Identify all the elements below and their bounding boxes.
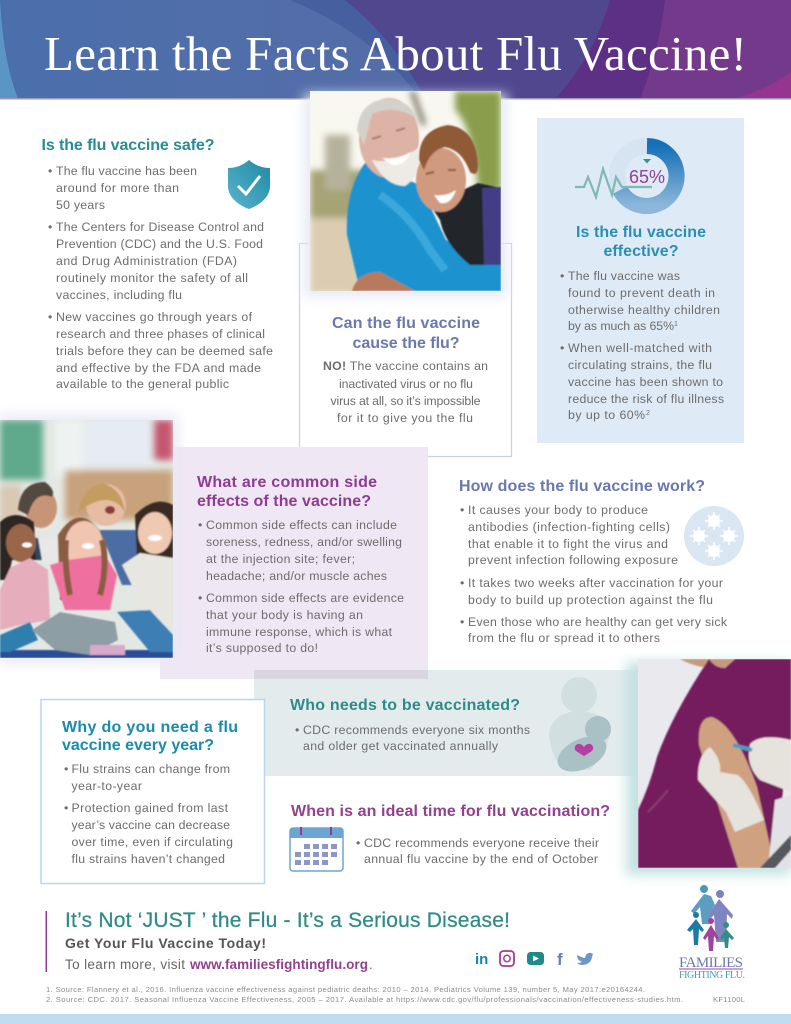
side effects bullet list: Common side effects can include	[206, 518, 397, 532]
side effects bullet list: at the injection site; fever;	[206, 552, 355, 566]
social media icons	[475, 950, 593, 969]
heading: effective: Is the flu vaccine	[576, 224, 706, 241]
when bullet text: annual flu vaccine by the end of October	[364, 852, 598, 866]
safe bullet list	[48, 164, 273, 391]
safe bullet list: research and three phases of clinical	[56, 327, 265, 341]
answer text: virus at all, so it’s impossible	[330, 394, 481, 408]
safe bullet list: Prevention (CDC) and the U.S. Food	[56, 237, 263, 251]
call to action: www.familiesfightingflu.org	[189, 957, 368, 972]
blonde boy	[86, 484, 126, 526]
call to action: .	[369, 957, 373, 972]
safe bullet list: •	[48, 220, 52, 234]
effective bullet list: circulating strains, the flu	[568, 358, 712, 372]
panel: is the flu vaccine safe	[42, 137, 273, 391]
photo: group of children	[0, 415, 178, 663]
heading: side effects	[197, 474, 377, 510]
heading: how: How does the flu vaccine work?	[459, 478, 705, 495]
who bullet list	[295, 723, 530, 753]
left girl	[0, 515, 36, 580]
how bullet list: that enable it to fight the virus and	[468, 537, 668, 551]
safe bullet list: The flu vaccine has been	[56, 164, 197, 178]
icon: 65% donut chart with pulse: 65%	[629, 167, 665, 187]
heading: why: Why do you need a flu	[62, 719, 238, 736]
logo: Families Fighting Flu	[679, 885, 745, 981]
safe bullet list: routinely monitor the safety of all	[56, 271, 248, 285]
heading: who: Who needs to be vaccinated?	[290, 697, 520, 714]
who bullet list: •	[295, 723, 299, 737]
heading: effective	[576, 224, 706, 260]
safe bullet list: around for more than	[56, 181, 179, 195]
safe bullet list: •	[48, 164, 52, 178]
effective bullet list: The flu vaccine was	[568, 269, 680, 283]
icon: pregnant silhouette	[549, 677, 612, 779]
effective bullet list: 1	[674, 321, 678, 328]
bottom bar	[0, 1014, 791, 1024]
man jacket	[347, 163, 501, 291]
safe bullet list: trials before they can be deemed safe	[56, 344, 273, 358]
footnotes: KF1100L	[713, 995, 745, 1004]
right girl	[134, 500, 173, 559]
panel: who needs to be vaccinated	[254, 670, 638, 779]
how bullet list	[460, 503, 728, 645]
photo: pregnant woman receiving vaccination	[626, 659, 791, 875]
heading: why	[62, 719, 238, 754]
heading: cause: cause the flu?	[352, 335, 460, 352]
side effects bullet list: headache; and/or muscle aches	[206, 569, 387, 583]
social media icons: f	[557, 950, 563, 969]
heading: cause: Can the flu vaccine	[332, 315, 480, 332]
effective bullet list: found to prevent death in	[568, 286, 715, 300]
effective bullet list: •	[560, 269, 564, 283]
when bullet text: CDC recommends everyone receive their	[364, 836, 599, 850]
effective bullet list: reduce the risk of flu illness	[568, 392, 724, 406]
safe bullet list: available to the general public	[56, 377, 229, 391]
who bullet list: CDC recommends everyone six months	[303, 723, 530, 737]
how bullet list: It takes two weeks after vaccination for your	[468, 576, 723, 590]
effective bullet list	[560, 269, 724, 422]
when bullet text: •	[356, 836, 360, 850]
panel: is the flu vaccine effective	[537, 118, 744, 443]
logo: Families Fighting Flu: FAMILIES	[679, 955, 743, 971]
footnotes: 1. Source: Flannery et al., 2016. Influenza vaccine effectiveness against pediatric deaths: 2010 – 2014. Pediatrics Volume 139, number 5, May 2017:e20164244.	[46, 985, 645, 994]
icon: calendar	[290, 827, 343, 871]
effective bullet list: When well-matched with	[568, 341, 712, 355]
safe bullet list: •	[48, 310, 52, 324]
cta link: To learn more, visit	[65, 957, 185, 972]
heading: safe: Is the flu vaccine safe?	[42, 137, 214, 154]
effective bullet list: •	[560, 341, 564, 355]
heading: side effects: effects of the vaccine?	[197, 493, 371, 510]
safe bullet list: 50 years	[56, 198, 105, 212]
title: Learn the Facts About Flu Vaccine!	[44, 26, 747, 81]
side effects bullet list: •	[198, 518, 202, 532]
how bullet list: •	[460, 503, 464, 517]
how bullet list: body to build up protection against the flu	[468, 593, 713, 607]
answer text: NO! The vaccine contains an	[323, 359, 488, 373]
effective bullet list: by up to 60%	[568, 408, 645, 422]
panel: how does the flu vaccine work	[459, 478, 744, 645]
panel: when is an ideal time	[290, 803, 610, 871]
how bullet list: antibodies (infection-fighting cells)	[468, 520, 670, 534]
side effects bullet list: immune response, which is what	[206, 625, 393, 639]
effective bullet list: by as much as 65%	[568, 319, 674, 333]
heading: cause	[332, 315, 480, 352]
who bullet list: and older get vaccinated annually	[303, 739, 499, 753]
why bullet list: Protection gained from last	[72, 801, 229, 815]
boy back	[25, 494, 58, 529]
how bullet list: It causes your body to produce	[468, 503, 648, 517]
why bullet list: over time, even if circulating	[72, 835, 233, 849]
effective bullet list: vaccine has been shown to	[568, 375, 723, 389]
when bullet text	[356, 836, 599, 866]
effective bullet list: otherwise healthy children	[568, 303, 720, 317]
panel: why do you need a flu vaccine every year	[41, 700, 264, 884]
effective bullet list: 2	[646, 410, 650, 417]
header banner	[0, 0, 791, 100]
side effects bullet list: soreness, redness, and/or swelling	[206, 535, 402, 549]
man head	[359, 98, 419, 178]
side effects bullet list: •	[198, 591, 202, 605]
call to action	[46, 909, 510, 972]
photo: hugging older couple	[304, 91, 507, 297]
safe bullet list: vaccines, including flu	[56, 288, 182, 302]
how bullet list: prevent infection following exposure	[468, 553, 678, 567]
safe bullet list: The Centers for Disease Control and	[56, 220, 264, 234]
how bullet list: •	[460, 576, 464, 590]
why bullet list: •	[64, 801, 68, 815]
safe bullet list: and Drug Administration (FDA)	[56, 254, 237, 268]
side effects bullet list	[198, 518, 404, 655]
safe bullet list: New vaccines go through years of	[56, 310, 253, 324]
why bullet list	[64, 762, 233, 866]
why bullet list: Flu strains can change from	[72, 762, 230, 776]
why bullet list: flu strains haven’t changed	[72, 852, 225, 866]
social media icons: in	[475, 951, 488, 968]
answer text	[323, 359, 488, 425]
how bullet list: Even those who are healthy can get very sick	[468, 615, 728, 629]
heading: when: When is an ideal time for flu vaccination?	[291, 803, 610, 820]
side effects bullet list: it’s supposed to do!	[206, 641, 318, 655]
why bullet list: •	[64, 762, 68, 776]
side effects bullet list: that your body is having an	[206, 608, 363, 622]
heading: side effects: What are common side	[197, 474, 377, 491]
answer text: inactivated virus or no flu	[339, 377, 473, 391]
footnotes	[46, 985, 745, 1004]
answer text: for it to give you the flu	[337, 411, 473, 425]
heading: effective: effective?	[604, 243, 678, 260]
woman head	[416, 148, 466, 212]
how bullet list: from the flu or spread it to others	[468, 631, 660, 645]
icon: shield	[228, 160, 270, 209]
cta subheading: Get Your Flu Vaccine Today!	[65, 935, 266, 951]
icon: 65% donut chart with pulse	[575, 146, 677, 206]
panel: can the flu vaccine cause the flu	[300, 244, 512, 456]
cta heading: It’s Not ‘JUST ’ the Flu - It’s a Serious Disease!	[65, 909, 510, 932]
middle girl	[58, 518, 106, 600]
heading: why: vaccine every year?	[62, 737, 214, 754]
how bullet list: •	[460, 615, 464, 629]
panel: common side effects	[160, 447, 428, 679]
woman vest	[430, 183, 501, 265]
why bullet list: year-to-year	[72, 779, 142, 793]
footnotes: 2. Source: CDC. 2017. Seasonal Influenza Vaccine Effectiveness, 2005 – 2017. Available at https://www.cdc.gov/flu/professionals/vaccination/effectiveness-studies.htm.	[46, 995, 683, 1004]
icon: virus particles	[684, 506, 744, 566]
safe bullet list: and effective by the FDA and made	[56, 361, 261, 375]
side effects bullet list: Common side effects are evidence	[206, 591, 404, 605]
why bullet list: year’s vaccine can decrease	[72, 818, 230, 832]
logo: Families Fighting Flu: FIGHTING FLU.	[679, 970, 745, 981]
